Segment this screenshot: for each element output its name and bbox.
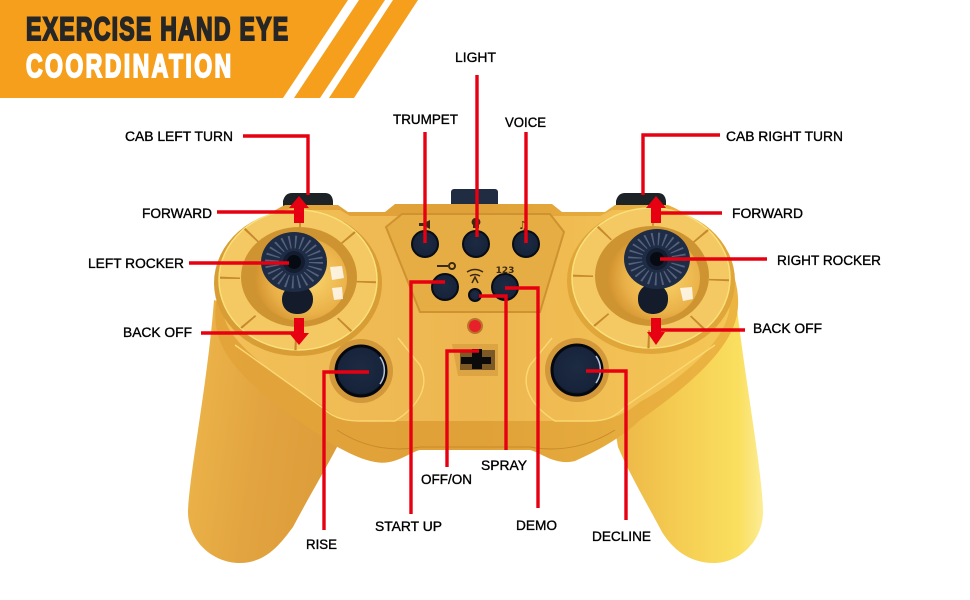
banner stripe 2 [329,0,418,98]
left cap [261,232,327,292]
panel buttons [412,231,539,301]
upper face plate [223,210,730,421]
callout: spray: SPRAY [481,458,527,473]
callout: forward right [646,196,803,223]
indicator LED [468,319,482,333]
left ring ticks [229,218,367,342]
callout: light: LIGHT [455,50,496,65]
banner background [0,0,348,98]
callout: trumpet: TRUMPET [393,112,458,127]
right cap hub [646,248,668,270]
icon: voice: ♫ [518,219,528,232]
game controller [188,189,763,563]
power switch [452,344,498,376]
right ring shadow [567,208,735,354]
right big button [545,338,609,402]
left grip [188,300,340,563]
callout: right rocker: RIGHT ROCKER [777,253,881,268]
icon: spray [467,270,483,283]
banner [0,0,418,98]
callout: forward right: FORWARD [732,206,803,221]
panel function icons [419,218,528,283]
callout: cab left turn: CAB LEFT TURN [125,129,233,144]
right recess [595,226,709,326]
callout: rise [306,372,369,552]
callout: voice: VOICE [505,115,546,130]
shoulder buttons [283,189,666,209]
callout: start up: START UP [375,519,442,534]
left recess [241,227,357,327]
right cap ribs [635,239,679,279]
title line 2: COORDINATION [26,48,231,84]
callout: voice [505,115,546,243]
left cap socket [287,255,301,269]
callout: cab right turn: CAB RIGHT TURN [726,129,843,144]
left dome shine [330,266,344,300]
callout: back off left: BACK OFF [123,325,192,340]
left ring shadow [214,210,382,356]
callout: demo: DEMO [516,518,557,533]
icon: key [437,263,455,269]
callout: forward left: FORWARD [142,206,212,221]
callout: off/on: OFF/ON [421,472,472,487]
lobe highlight lines [235,338,715,421]
callout: cab right turn [643,129,843,195]
left dome [255,237,347,321]
callout: start up [375,282,445,534]
left outer ring [219,210,377,350]
lower rim line [337,430,615,449]
icon: demo: 123 [496,266,514,276]
callout: decline: DECLINE [592,529,651,544]
left big button [329,339,393,403]
callout: back off left [123,318,309,345]
left stick [214,210,382,356]
callout: decline [586,371,651,544]
banner stripe 1 [294,0,385,98]
callout: left rocker: LEFT ROCKER [88,256,184,271]
callout: trumpet [393,112,458,243]
icon: light [472,218,480,228]
icon: trumpet [419,220,430,229]
left cap ribs [272,242,316,282]
callout: back off right: BACK OFF [753,321,822,336]
callout: demo [505,288,557,533]
right dome shine [680,287,693,301]
right cap [624,229,690,289]
right grip [600,300,763,563]
right dome [608,236,700,320]
controller body [215,204,738,463]
right stem [638,284,668,314]
title line 1: EXERCISE HAND EYE [26,11,288,47]
right outer ring [572,208,730,348]
callout: spray [479,296,527,473]
callout: cab left turn [125,129,308,195]
callout: rise: RISE [306,537,337,552]
left cap hub [283,251,305,273]
left stem [282,285,313,314]
callout: off/on [421,351,479,487]
right stick [567,208,735,354]
right cap socket [650,252,664,266]
callout: forward left [142,196,309,223]
center panel [386,214,564,312]
right ring ticks [582,216,720,340]
callout: back off right [647,318,822,345]
